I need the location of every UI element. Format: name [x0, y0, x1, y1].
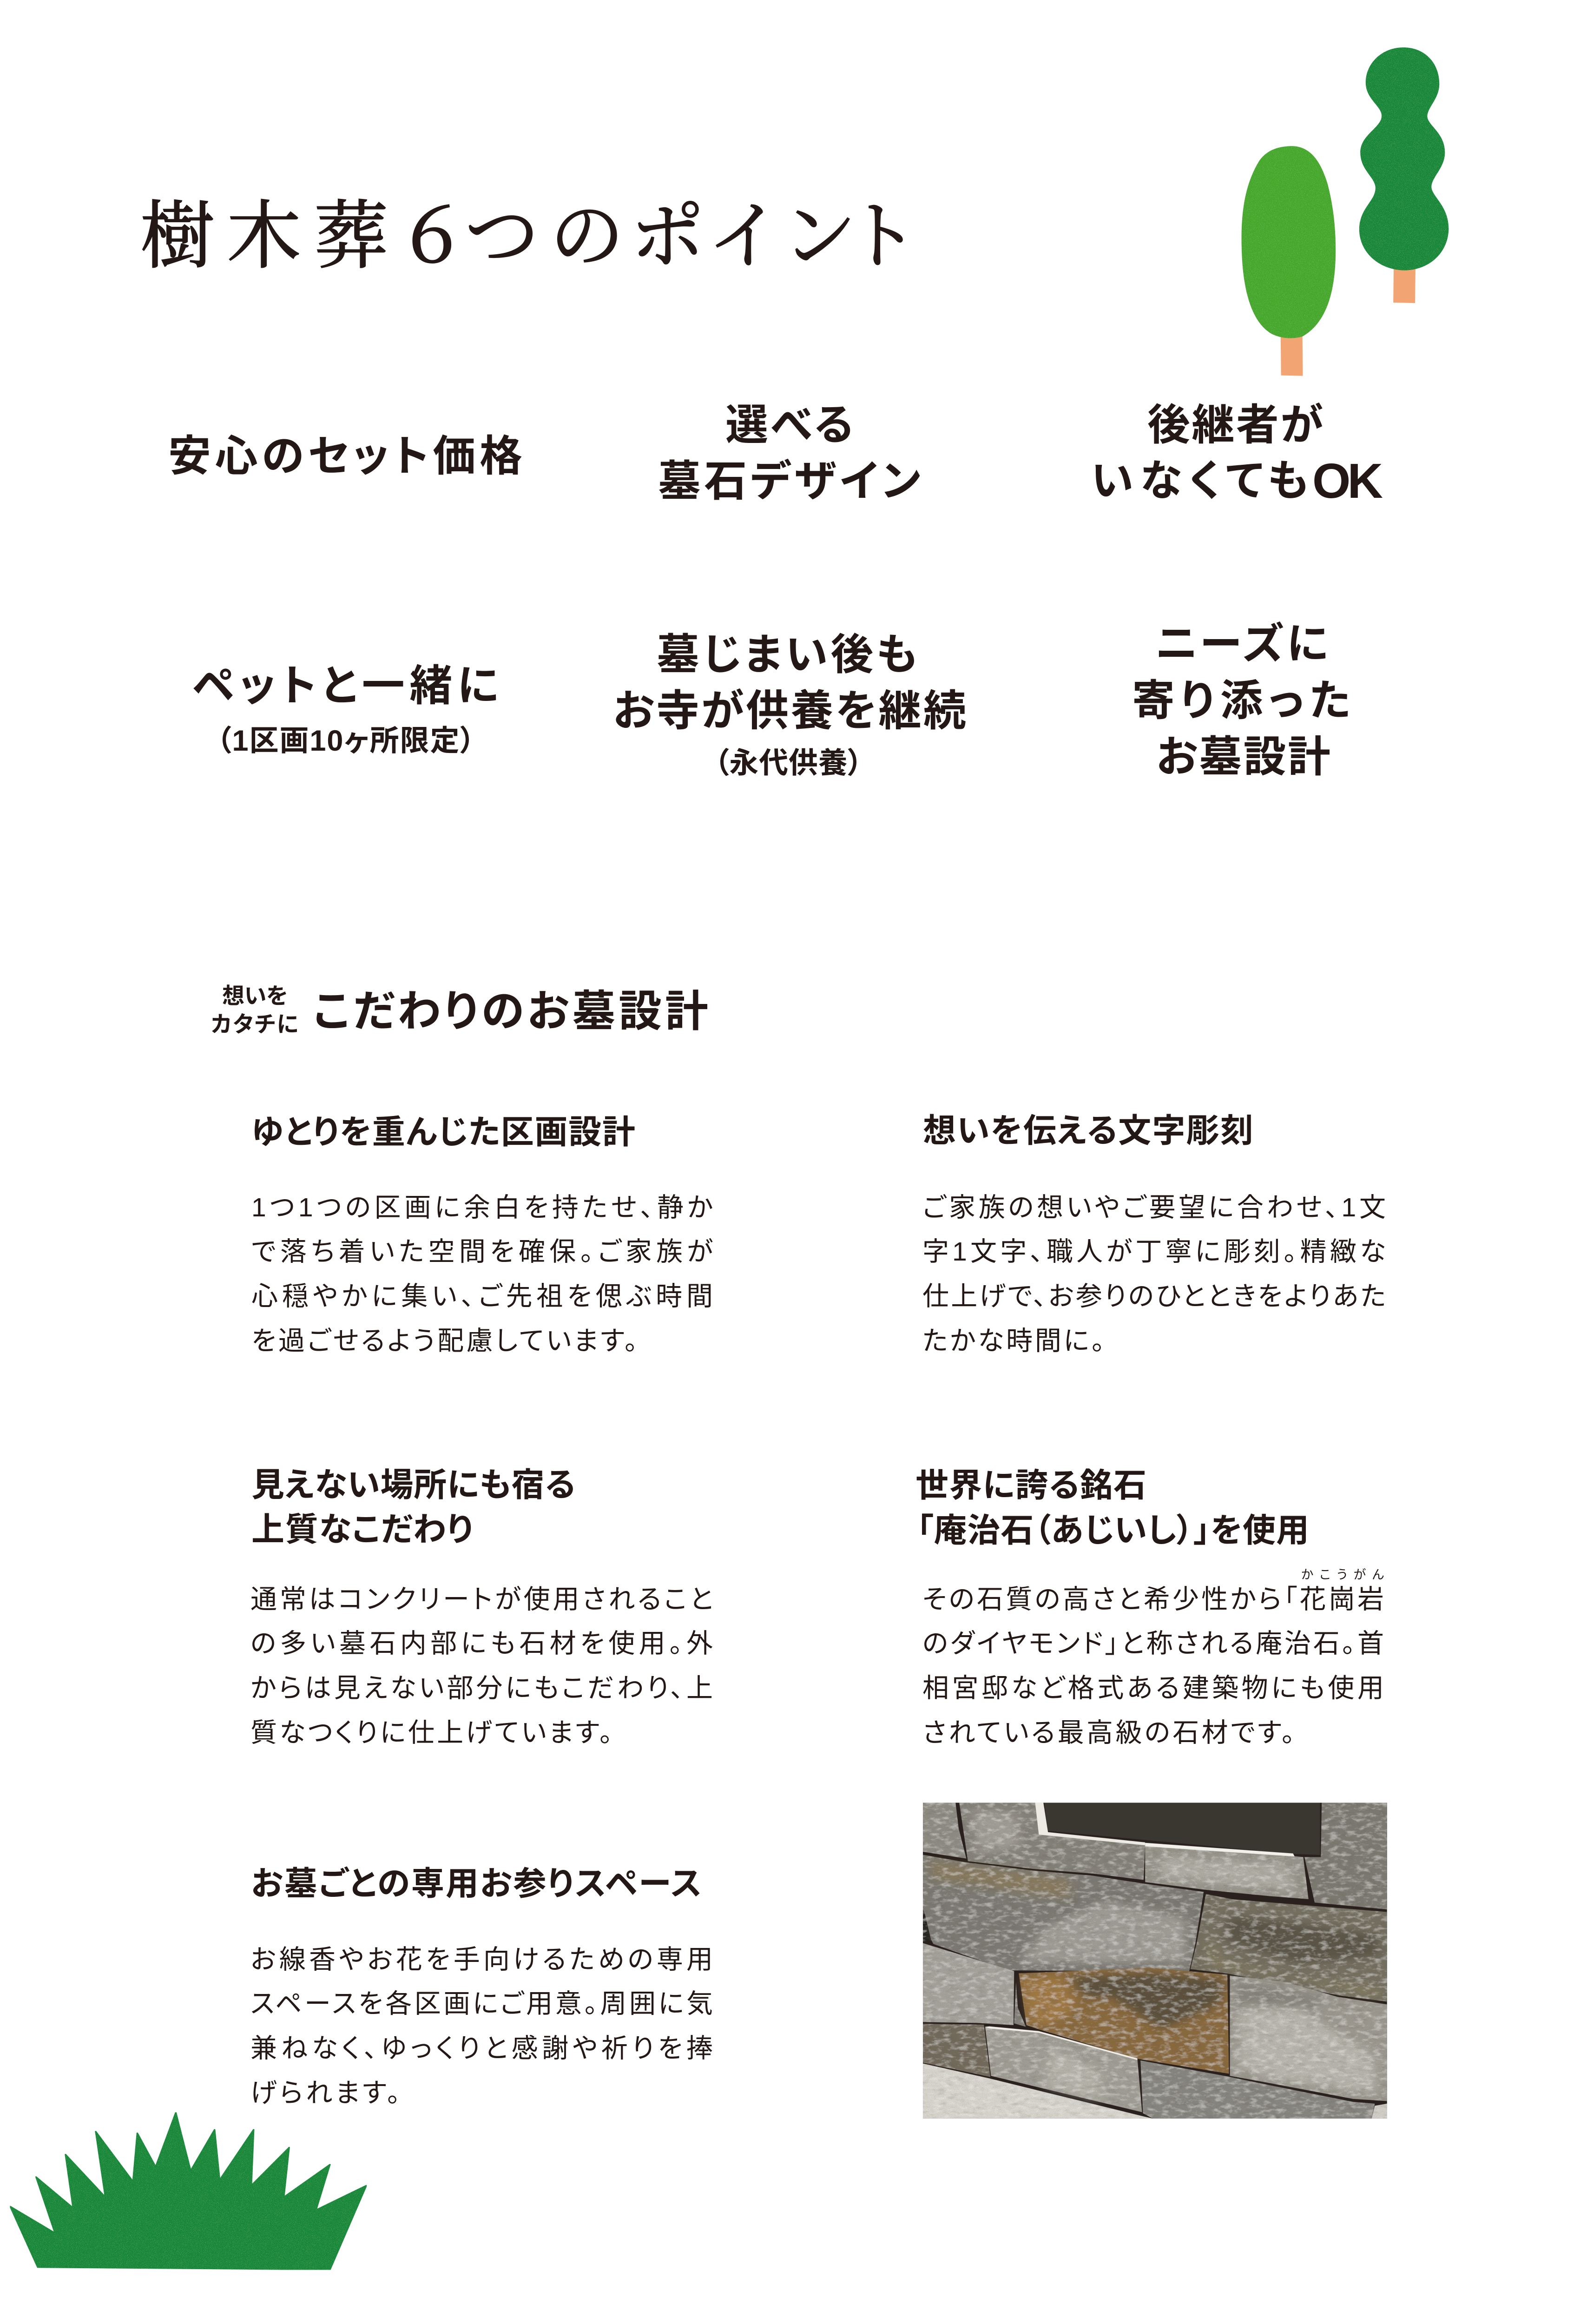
block: hidden quality: からは見えない部分にもこだわり、上 [250, 1673, 713, 1703]
point: no successor needed: 後継者が [1147, 402, 1323, 449]
block: hidden quality: 上質なこだわり [251, 1512, 473, 1548]
point: perpetual memorial: （永代供養） [714, 747, 862, 779]
block: engraving: 字1文字、職人が丁寧に彫刻。精緻な [922, 1237, 1386, 1267]
block: hidden quality: 通常はコンクリートが使用されること [250, 1585, 713, 1614]
point: choose stone design [658, 402, 921, 505]
block: spacious plot design: 心穏やかに集い、ご先祖を偲ぶ時間 [251, 1281, 713, 1311]
block: spacious plot design: ゆとりを重んじた区画設計 [251, 1114, 635, 1151]
photo: aji stone wall [923, 1802, 1387, 2119]
point: tailored design [1132, 621, 1350, 781]
point: perpetual memorial: お寺が供養を継続 [613, 687, 966, 735]
block: private worship space: お墓ごとの専用お参りスペース [251, 1866, 702, 1902]
block: private worship space [250, 1866, 713, 2108]
block: aji stone: 世界に誇る銘石 [915, 1467, 1146, 1504]
block: hidden quality: 見えない場所にも宿る [251, 1467, 575, 1504]
heading: dedicated grave design: カタチに [211, 1012, 298, 1037]
block: private worship space: スペースを各区画にご用意。周囲に気 [250, 1989, 713, 2019]
point: no successor needed: いなくても [1091, 457, 1309, 505]
block: spacious plot design: 1つ1つの区画に余白を持たせ、静か [251, 1193, 713, 1222]
block: hidden quality: 質なつくりに仕上げています。 [250, 1718, 612, 1748]
block: hidden quality: の多い墓石内部にも石材を使用。外 [250, 1629, 713, 1658]
block: hidden quality [250, 1467, 713, 1748]
title: 樹木葬６つのポイント [140, 176, 919, 283]
point: perpetual memorial: 墓じまい後も [657, 631, 917, 679]
point: choose stone design: 墓石デザイン [658, 458, 921, 505]
block: spacious plot design [251, 1114, 713, 1356]
icon: grass [10, 2113, 367, 2270]
block: aji stone: その石質の高さと希少性から「花崗岩 [922, 1585, 1384, 1614]
block: aji stone: されている最高級の石材です。 [922, 1718, 1295, 1748]
block: private worship space: げられます。 [250, 2078, 400, 2108]
block: engraving: 仕上げで、お参りのひとときをよりあた [922, 1281, 1386, 1311]
point: with pets [192, 662, 499, 757]
panel: six points [168, 402, 1383, 781]
point: set price: 安心のセット価格 [168, 433, 522, 480]
point: no successor needed: OK [1312, 454, 1383, 508]
icon: two trees [1242, 47, 1448, 376]
point: with pets: ペットと一緒に [192, 662, 499, 710]
block: engraving: ご家族の想いやご要望に合わせ、1文 [922, 1193, 1386, 1222]
heading: dedicated grave design: 想いを [222, 984, 288, 1009]
heading: dedicated grave design: こだわりのお墓設計 [313, 987, 708, 1036]
point: tailored design: 寄り添った [1132, 677, 1350, 725]
block: spacious plot design: を過ごせるよう配慮しています。 [251, 1326, 638, 1356]
block: engraving [922, 1113, 1386, 1356]
block: private worship space: お線香やお花を手向けるための専用 [250, 1945, 713, 1974]
block: engraving: たかな時間に。 [922, 1326, 1105, 1356]
block: aji stone [915, 1467, 1384, 1748]
block: spacious plot design: で落ち着いた空間を確保。ご家族が [251, 1237, 713, 1267]
point: no successor needed [1091, 402, 1383, 508]
block: engraving: 想いを伝える文字彫刻 [923, 1113, 1253, 1149]
point: with pets: （1区画10ヶ所限定） [217, 725, 475, 757]
block: private worship space: 兼ねなく、ゆっくりと感謝や祈りを捧 [250, 2034, 713, 2063]
point: tailored design: ニーズに [1155, 621, 1328, 668]
point: perpetual memorial [613, 631, 966, 779]
point: tailored design: お墓設計 [1156, 733, 1330, 781]
furigana: かこうがん [1301, 1568, 1384, 1582]
block: aji stone: 相宮邸など格式ある建築物にも使用 [922, 1673, 1384, 1703]
block: aji stone: 「庵治石（あじいし）」を使用 [917, 1512, 1309, 1549]
point: choose stone design: 選べる [725, 402, 853, 449]
block: aji stone: のダイヤモンド」と称される庵治石。首 [922, 1629, 1384, 1658]
